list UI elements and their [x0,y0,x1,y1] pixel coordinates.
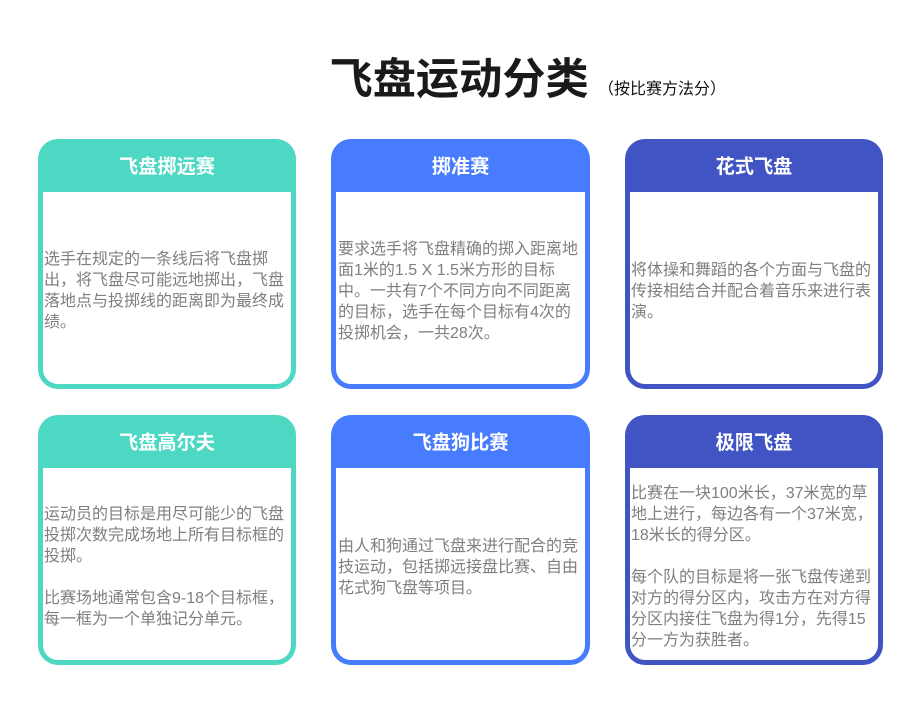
text block: 极限飞盘 description: 对方的得分区内，攻击方在对方得 [631,590,871,607]
text block: 极限飞盘 description [631,484,873,649]
text block: 极限飞盘 description: 分区内接住飞盘为得1分，先得15 [631,611,866,628]
title: 飞盘运动分类 [330,56,589,104]
text block: 飞盘狗比赛 description: 花式狗飞盘等项目。 [338,580,482,596]
text block: 掷准赛 description: 面1米的1.5 X 1.5米方形的目标 [338,262,555,278]
text block: 飞盘狗比赛 description [338,537,578,596]
text block: 花式飞盘 description: 演。 [631,304,663,320]
content area: 掷准赛 [336,192,585,384]
text block: 掷准赛 description [338,240,578,342]
content area: 飞盘狗比赛 [336,468,585,660]
content area: 飞盘高尔夫 [43,468,291,660]
text block: 飞盘狗比赛 description: 技运动，包括掷远接盘比赛、自由 [338,558,578,576]
heading: 飞盘狗比赛: 飞盘狗比赛 [413,433,508,454]
text block: 花式飞盘 description: 传接相结合并配合着音乐来进行表 [631,282,871,300]
text block: 飞盘高尔夫 description: 运动员的目标是用尽可能少的飞盘 [44,506,284,523]
text block: 飞盘高尔夫 description: 比赛场地通常包含9-18个目标框， [44,590,284,607]
text block: 飞盘掷远赛 description: 落地点与投掷线的距离即为最终成 [44,293,284,310]
text block: 飞盘高尔夫 description [44,505,284,628]
text block: 花式飞盘 description: 将体操和舞蹈的各个方面与飞盘的 [631,262,871,278]
panel: 飞盘掷远赛 [38,139,296,389]
text block: 飞盘高尔夫 description: 投掷。 [44,548,92,565]
text block: 飞盘狗比赛 description: 由人和狗通过飞盘来进行配合的竞 [338,538,578,554]
text block: 掷准赛 description: 投掷机会，一共28次。 [338,324,500,342]
text block: 掷准赛 description: 要求选手将飞盘精确的掷入距离地 [338,240,578,258]
panel: 极限飞盘 [625,415,883,665]
heading: 飞盘高尔夫: 飞盘高尔夫 [119,433,215,454]
text block: 极限飞盘 description: 分一方为获胜者。 [631,632,759,649]
panel: 飞盘高尔夫 [38,415,296,665]
content area: 飞盘掷远赛 [43,192,291,384]
text block: 极限飞盘 description: 地上进行，每边各有一个37米宽， [631,506,873,523]
heading: 飞盘掷远赛: 飞盘掷远赛 [119,157,215,178]
content area: 极限飞盘 [630,468,878,660]
subtitle: （按比赛方法分） [598,81,726,98]
text block: 花式飞盘 description [631,261,871,320]
heading: 花式飞盘: 花式飞盘 [716,157,792,178]
text block: 掷准赛 description: 的目标，选手在每个目标有4次的 [338,304,571,320]
heading: 极限飞盘: 极限飞盘 [716,433,792,454]
panel: 花式飞盘 [625,139,883,389]
text block: 极限飞盘 description: 每个队的目标是将一张飞盘传递到 [631,569,871,586]
text block: 飞盘掷远赛 description: 出，将飞盘尽可能远地掷出，飞盘 [44,272,284,289]
text block: 飞盘高尔夫 description: 每一框为一个单独记分单元。 [44,611,252,628]
text block: 飞盘掷远赛 description: 绩。 [44,314,76,331]
text block: 极限飞盘 description: 18米长的得分区。 [631,527,761,544]
text block: 飞盘掷远赛 description: 选手在规定的一条线后将飞盘掷 [44,251,268,268]
content area: 花式飞盘 [630,192,878,384]
text block: 掷准赛 description: 中。一共有7个不同方向不同距离 [338,282,571,300]
text block: 极限飞盘 description: 比赛在一块100米长，37米宽的草 [631,485,868,502]
text block: 飞盘高尔夫 description: 投掷次数完成场地上所有目标框的 [44,527,284,544]
panel: 飞盘狗比赛 [331,415,590,665]
heading: 掷准赛: 掷准赛 [432,157,489,178]
text block: 飞盘掷远赛 description [44,250,284,331]
panel: 掷准赛 [331,139,590,389]
